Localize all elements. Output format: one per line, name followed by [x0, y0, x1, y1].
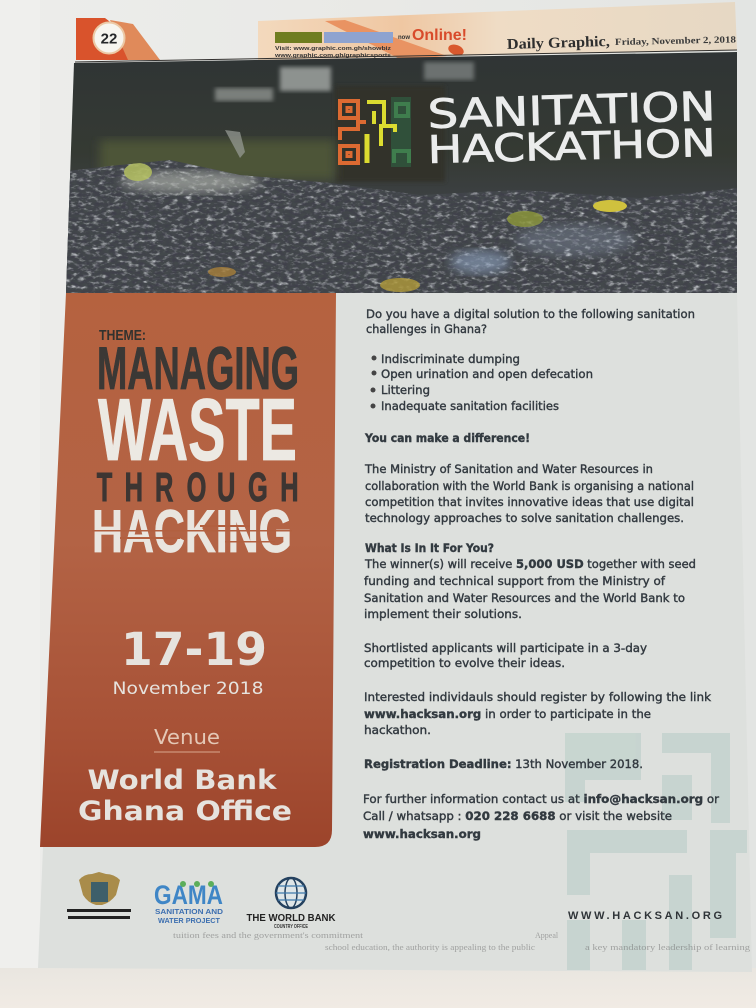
background buildings and trees — [100, 62, 474, 182]
online promo banner: Visit: www.graphic.com.gh/showbiz — [275, 46, 391, 52]
paragraph: competition: technology approaches to solve sanitation challenges. — [365, 511, 684, 525]
logo: The World Bank: COUNTRY OFFICE — [274, 924, 309, 930]
challenge bullet list: Open urination and open defecation — [381, 367, 593, 381]
logo: ministry coat of arms — [67, 872, 131, 919]
challenge bullet list: Littering — [381, 383, 430, 397]
newspaper header strip — [75, 2, 737, 62]
glitch cuts — [92, 525, 292, 542]
show-through reversed newsprint — [173, 931, 750, 952]
online promo banner — [274, 20, 467, 60]
theme heading: MANAGING — [97, 335, 299, 402]
newspaper name and date: Daily Graphic, — [507, 34, 610, 53]
paragraph: competition — [364, 462, 694, 525]
faded watermark pattern — [565, 733, 747, 970]
paragraph: registration link: www.hacksan.org in order to participate in the — [364, 707, 651, 721]
panel: theme and event details — [40, 293, 336, 847]
logo: GAMA: WATER PROJECT — [158, 916, 220, 925]
hackathon title: SANITATION — [427, 84, 716, 138]
venue: Ghana Office — [78, 796, 292, 827]
contact details: For further information contact us at info@hacksan.org or — [363, 792, 719, 806]
body copy: challenges and call to action — [363, 307, 719, 841]
sanitation hackathon logo icon — [340, 101, 409, 163]
venue — [78, 725, 292, 827]
theme heading: HACKING — [92, 498, 292, 565]
paragraph: prize: The winner(s) will receive 5,000 USD together with seed — [364, 557, 696, 571]
venue: Venue — [154, 725, 220, 749]
logo: GAMA: GAMA — [154, 880, 223, 910]
page number badge — [94, 22, 124, 54]
event dates — [112, 623, 267, 699]
event dates: November 2018 — [112, 679, 264, 699]
venue: World Bank — [88, 765, 278, 796]
paragraph: prize: implement their solutions. — [364, 607, 522, 621]
challenge bullet list: Inadequate sanitation facilities — [381, 399, 559, 413]
contact details: Call / whatsapp : 020 228 6688 or visit the website — [363, 809, 672, 823]
theme heading — [92, 327, 299, 565]
contact details — [363, 792, 719, 841]
online promo banner: now — [398, 35, 410, 41]
theme heading: THROUGH — [97, 465, 299, 511]
logo: The World Bank — [246, 878, 336, 930]
rubbish texture — [60, 155, 740, 295]
show-through reversed newsprint: school education, the authority is appealing to the public — [325, 943, 536, 952]
show-through reversed newsprint: a key mandatory leadership of learning — [585, 943, 750, 952]
newspaper name and date — [507, 34, 736, 53]
hackathon title — [427, 84, 716, 172]
logo: GAMA — [154, 880, 224, 925]
paragraph: registration link: Interested individauls should register by following the link — [364, 690, 711, 704]
paragraph: competition: competition that invites innovative ideas that use digital — [365, 495, 694, 509]
theme heading: WASTE — [98, 380, 297, 479]
paragraph: competition: The Ministry of Sanitation and Water Resources in — [364, 462, 653, 476]
online promo banner: www.graphic.com.gh/graphicsports — [274, 53, 391, 59]
hero photo: waste dump — [60, 50, 740, 295]
contact details: www.hacksan.org — [363, 827, 481, 841]
show-through reversed newsprint: tuition fees and the government's commitment — [173, 931, 364, 940]
page number badge: 22 — [101, 30, 117, 48]
registration deadline: Registration Deadline: 13th November 2018. — [364, 757, 643, 771]
website footer: WWW.HACKSAN.ORG — [568, 910, 722, 922]
challenge bullet list: Indiscriminate dumping — [381, 352, 520, 366]
newspaper name and date: Friday, November 2, 2018 — [615, 35, 736, 48]
intro question: Do you have a digital solution to the following sanitation — [366, 307, 695, 321]
event dates: 17-19 — [121, 623, 267, 676]
intro question — [366, 307, 695, 336]
paragraph: shortlist — [364, 641, 647, 670]
paragraph: prize: Sanitation and Water Resources and the World Bank to — [364, 591, 685, 605]
logo: The World Bank: THE WORLD BANK — [246, 913, 336, 924]
paragraph: shortlist: Shortlisted applicants will participate in a 3-day — [364, 641, 647, 655]
logo: GAMA: SANITATION AND — [155, 907, 224, 916]
paragraph: registration link: hackathon. — [364, 723, 431, 737]
challenge bullet list — [370, 352, 593, 413]
intro question: challenges in Ghana? — [366, 322, 487, 336]
paragraph: registration link — [364, 690, 711, 737]
show-through reversed newsprint: Appeal — [535, 931, 559, 940]
paragraph: competition: collaboration with the World Bank is organising a national — [365, 479, 694, 493]
hackathon title: HACKATHON — [427, 121, 716, 172]
online promo banner: Online! — [412, 27, 467, 44]
paragraph: prize: funding and technical support from the Ministry of — [364, 574, 666, 588]
paragraph: shortlist: competition to evolve their ideas. — [364, 656, 565, 670]
theme heading: THEME: — [99, 327, 146, 344]
paragraph: prize — [364, 541, 696, 621]
paragraph: prize: What Is In It For You? — [365, 541, 494, 555]
ad sheet background — [38, 293, 752, 972]
subheading: You can make a difference! — [364, 431, 530, 445]
